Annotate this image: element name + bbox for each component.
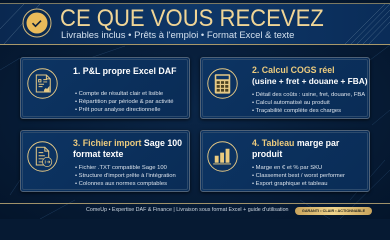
title: CE QUE VOUS RECEVEZ [60, 5, 324, 32]
heading: (usine + fret + douane + FBA) [252, 76, 367, 86]
bullet list [75, 91, 174, 113]
panel: Sage import [20, 130, 190, 192]
heading [252, 65, 368, 86]
icon: report [27, 68, 58, 99]
subtitle: Livrables inclus • Prêts à l'emploi • Format Excel & texte [61, 30, 294, 41]
bullet list: • Détail des coûts : usine, fret, douane, FBA [252, 92, 365, 98]
heading: produit [252, 149, 282, 159]
bullet list: • Traçabilité complète des charges [252, 108, 341, 114]
bullet list: • Colonnes aux normes comptables [75, 181, 167, 187]
heading: 2. Calcul COGS réel [252, 65, 335, 75]
footer rule [0, 202, 390, 204]
icon: gold check badge [22, 8, 52, 38]
panel: P&L [20, 57, 190, 119]
bullet list: • Export graphique et tableau [252, 181, 327, 187]
heading: 3. Fichier import Sage 100 [73, 138, 182, 148]
bullet list: • Compte de résultat clair et lisible [75, 91, 163, 97]
bullet list: • Répartition par période & par activité [75, 99, 174, 105]
icon: text file export [27, 141, 58, 172]
guarantee badge: GARANTI • CLAIR • ACTIONNABLE [302, 209, 365, 213]
panel: COGS [200, 57, 370, 119]
header band [0, 3, 390, 45]
heading [252, 138, 340, 159]
heading: format texte [73, 149, 123, 159]
icon: calculator [207, 68, 238, 99]
bullet list: • Marge en € et % par SKU [252, 165, 322, 171]
heading: 4. Tableau marge par [252, 138, 339, 148]
bullet list: • Calcul automatisé au produit [252, 100, 330, 106]
bullet list [252, 165, 345, 187]
header diagonal lines [0, 4, 390, 44]
bullet list: • Structure d'import prête à l'intégration [75, 173, 176, 179]
heading [73, 138, 182, 159]
footer text: ComeUp • Expertise DAF & Finance | Livraison sous format Excel + guide d'utilisation [86, 207, 289, 213]
bullet list: • Prêt pour analyse directionnelle [75, 107, 161, 113]
heading: 1. P&L propre Excel DAF [73, 66, 176, 76]
guarantee badge [295, 207, 372, 215]
panel: margin table [200, 130, 370, 192]
icon: bar chart [207, 141, 238, 172]
bullet list [252, 92, 366, 114]
bullet list: • Classement best / worst performer [252, 173, 345, 179]
bullet list [75, 165, 176, 187]
bullet list: • Fichier .TXT compatible Sage 100 [75, 165, 167, 171]
